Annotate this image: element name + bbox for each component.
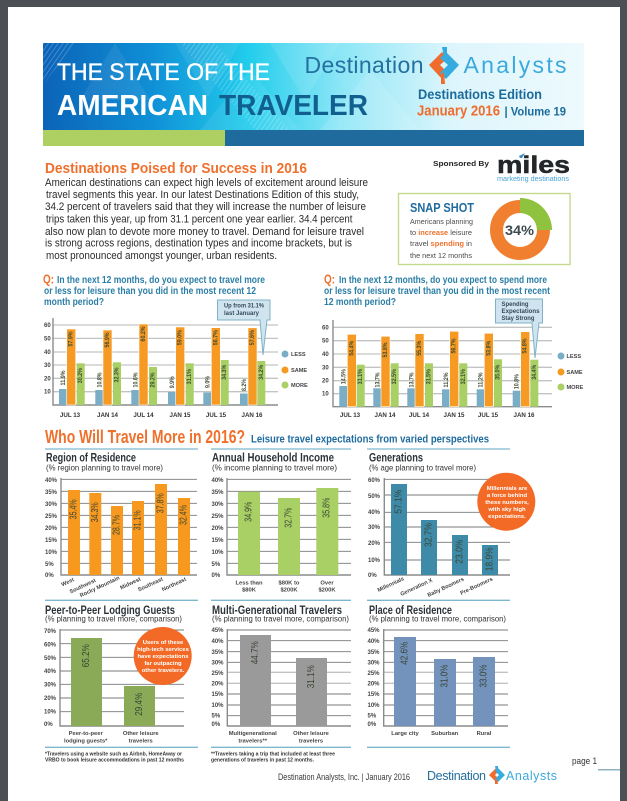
page number: page 1 bbox=[572, 756, 597, 766]
callout: high-tech users: other travelers. bbox=[142, 668, 185, 674]
bar chart: peer-to-peer: 70% bbox=[44, 629, 57, 635]
y axis labels: 50 bbox=[44, 336, 51, 342]
panel: place of residence: (% planning to travel more, comparison) bbox=[369, 614, 506, 624]
value labels: 60.2% bbox=[140, 326, 147, 342]
bar chart: peer-to-peer: 20% bbox=[44, 696, 57, 702]
value labels: 53.8% bbox=[382, 342, 389, 358]
bar chart: generations: 32.7% bbox=[424, 523, 434, 547]
panel: region of residence: (% region planning to travel more) bbox=[46, 464, 163, 472]
panel: snap shot: to increase leisure bbox=[410, 228, 472, 237]
bar chart: income: $80K to bbox=[279, 580, 300, 586]
x axis labels: JUL 14 bbox=[133, 412, 154, 419]
question: travel more or less: In the next 12 months, do you expect to travel more bbox=[57, 274, 265, 286]
bar chart: generations: 0% bbox=[368, 573, 377, 579]
bars: less bbox=[59, 389, 249, 405]
bar chart: peer-to-peer: 29.4% bbox=[134, 693, 145, 716]
panel: place of residence: Place of Residence bbox=[369, 605, 452, 617]
bar chart: peer-to-peer: lodging guests* bbox=[64, 738, 108, 744]
question: travel more or less: or less for leisure than you did in the most recent 12 bbox=[44, 285, 256, 297]
bar chart: multi-generational: 40% bbox=[212, 639, 224, 645]
legend: LESS bbox=[291, 352, 306, 358]
section heading: Who Will Travel More in 2016? bbox=[45, 427, 245, 447]
title: AMERICAN bbox=[57, 90, 208, 122]
title bbox=[57, 59, 368, 122]
question: travel more or less: month period? bbox=[44, 296, 104, 308]
intro paragraph: also now plan to devote more money to travel. Demand for leisure travel bbox=[45, 226, 364, 238]
x axis labels: JAN 15 bbox=[444, 412, 465, 419]
value labels: 9.0% bbox=[204, 376, 211, 388]
y axis labels: 50 bbox=[322, 339, 329, 345]
bar chart: generations: 40% bbox=[368, 510, 381, 516]
callout: up from 31.1%: last January bbox=[224, 310, 259, 317]
bar chart: region: 34.3% bbox=[90, 502, 101, 522]
bar chart: income: Over bbox=[320, 580, 334, 586]
value labels: 31.5% bbox=[426, 369, 432, 384]
value labels: 59.0% bbox=[177, 330, 184, 345]
bar chart: generations: 10% bbox=[368, 558, 381, 564]
bar chart: place of residence: 10% bbox=[368, 703, 380, 709]
bar chart: region: 10% bbox=[45, 550, 58, 556]
bars: same bbox=[67, 324, 257, 405]
bar chart: multi-generational: 20% bbox=[212, 682, 224, 688]
bar chart: place of residence: 30% bbox=[368, 660, 380, 666]
value labels bbox=[340, 338, 538, 389]
bar chart: region: 40% bbox=[45, 478, 58, 484]
footnote: peer-to-peer: VRBO to book leisure accommodations in past 12 months bbox=[45, 758, 184, 764]
y axis labels: 60 bbox=[322, 326, 329, 332]
legend: MORE bbox=[566, 385, 584, 391]
legend bbox=[558, 352, 584, 391]
donut chart: 34%: 34% bbox=[505, 222, 535, 238]
value labels: 31.1% bbox=[186, 369, 193, 384]
value labels: 56.7% bbox=[212, 330, 219, 345]
bar chart: generations: 23.0% bbox=[454, 540, 466, 564]
bar chart: region: 25% bbox=[45, 514, 58, 520]
x axis labels: JAN 16 bbox=[242, 412, 263, 419]
bar chart: income: $200K bbox=[318, 588, 336, 594]
legend: SAME bbox=[566, 370, 583, 376]
sponsor: miles marketing destinations: marketing destinations bbox=[497, 176, 570, 183]
edition text: Destinations Edition bbox=[418, 87, 542, 102]
bar chart: multi-generational: travelers** bbox=[238, 738, 268, 744]
bar chart: peer-to-peer: 40% bbox=[44, 669, 57, 675]
bar chart: place of residence: 25% bbox=[368, 671, 380, 677]
panel: generations bbox=[367, 449, 535, 599]
value labels: 34.3% bbox=[221, 365, 228, 380]
callout: high-tech users: high-tech services bbox=[137, 647, 190, 653]
panel: annual household income: (% income planning to travel more) bbox=[212, 464, 337, 472]
panel: multi-generational travelers: (% planning to travel more, comparison) bbox=[212, 614, 349, 624]
bar chart: income: 40% bbox=[212, 478, 224, 484]
value labels: 10.8% bbox=[514, 374, 521, 389]
edition text bbox=[417, 87, 566, 120]
edition text: January 2016 bbox=[417, 104, 500, 120]
bar chart: place of residence: 15% bbox=[368, 692, 380, 698]
panel: snap shot: Americans planning bbox=[410, 217, 473, 226]
callout: spending expectations: Stay Strong bbox=[502, 315, 535, 322]
intro paragraph: most pronounced amongst younger, urban residents. bbox=[46, 250, 277, 262]
panel: peer-to-peer lodging guests bbox=[44, 600, 198, 764]
bar chart: place of residence: 20% bbox=[368, 682, 380, 688]
bar chart: region: 30% bbox=[45, 502, 58, 508]
panel: generations: (% age planning to travel more) bbox=[369, 464, 476, 472]
bars: less bbox=[339, 386, 522, 407]
value labels: 34.2% bbox=[258, 365, 265, 380]
bar chart: region bbox=[45, 478, 197, 599]
question: travel more or less bbox=[43, 272, 265, 308]
y axis labels: 10 bbox=[322, 392, 329, 398]
value labels: 11.2% bbox=[478, 372, 485, 388]
bar chart: multi-generational bbox=[212, 628, 351, 744]
callout: high-tech users: have expectations bbox=[137, 654, 189, 660]
bar chart: place of residence: 0% bbox=[368, 722, 377, 728]
bar chart: peer-to-peer: 65.2% bbox=[81, 644, 92, 667]
title: THE STATE OF THE bbox=[57, 59, 270, 86]
x axis labels bbox=[340, 412, 535, 419]
logo: Destination Analysts: Analysts bbox=[464, 52, 566, 78]
bar chart: region: 28.7% bbox=[112, 515, 122, 535]
callout: high-tech users: Users of these bbox=[143, 640, 184, 646]
bars: more bbox=[77, 360, 265, 405]
bar chart: region: Southwest bbox=[69, 578, 97, 595]
y axis labels: 20 bbox=[44, 376, 51, 382]
bar chart: region: 35% bbox=[45, 490, 58, 496]
value labels: 14.5% bbox=[340, 369, 347, 384]
intro paragraph: American destinations can expect high levels of excitement around leisure bbox=[45, 177, 368, 189]
bar chart: peer-to-peer: Other leisure bbox=[123, 731, 159, 737]
question: spend more or less bbox=[324, 272, 550, 308]
intro paragraph bbox=[45, 177, 368, 262]
question: spend more or less: In the next 12 months, do you expect to spend more bbox=[339, 274, 547, 286]
callout: up from 31.1%: Up from 31.1% bbox=[224, 302, 264, 310]
value labels: 10.8% bbox=[96, 372, 103, 388]
x axis labels: JAN 14 bbox=[375, 412, 396, 419]
callout: millennials: these numbers, bbox=[485, 500, 529, 506]
bar chart: region: Southeast bbox=[137, 577, 164, 593]
bar chart: region: 31.1% bbox=[132, 510, 144, 530]
y axis labels bbox=[322, 326, 329, 398]
y axis labels: 20 bbox=[322, 379, 329, 385]
panel: snap shot: travel spending in bbox=[410, 239, 472, 248]
value labels: 32.1% bbox=[460, 369, 467, 384]
panel: multi-generational travelers bbox=[211, 600, 351, 764]
header banner bbox=[43, 43, 584, 146]
title: TRAVELER bbox=[219, 90, 368, 122]
sponsor: miles marketing destinations: miles bbox=[497, 152, 570, 179]
x axis labels: JAN 14 bbox=[97, 412, 119, 419]
bar chart: multi-generational: Multigenerational bbox=[229, 731, 277, 737]
footer logo bbox=[427, 766, 557, 784]
panel: region of residence bbox=[45, 449, 198, 599]
bar chart: generations bbox=[368, 478, 510, 599]
bar chart: multi-generational: 15% bbox=[212, 692, 224, 698]
bar chart: generations: 60% bbox=[368, 478, 381, 484]
bar chart: income: 10% bbox=[212, 550, 224, 556]
panel: annual household income bbox=[211, 449, 351, 594]
sponsor: miles marketing destinations: Sponsored By bbox=[433, 159, 490, 168]
bar chart: region: 5% bbox=[45, 562, 54, 568]
value labels: 57.6% bbox=[249, 330, 256, 345]
bar chart: region: Northeast bbox=[161, 577, 188, 593]
bar chart: income: Less than bbox=[235, 580, 263, 586]
value labels: 31.1% bbox=[357, 369, 364, 384]
y axis labels: 40 bbox=[322, 352, 329, 358]
section heading: Leisure travel expectations from varied perspectives bbox=[251, 434, 489, 446]
value labels: 11.2% bbox=[443, 372, 450, 388]
bar chart: region: 0% bbox=[45, 573, 54, 579]
bar chart: place of residence: 45% bbox=[368, 628, 380, 634]
bar chart: region: Midwest bbox=[119, 577, 142, 591]
value labels: 56.9% bbox=[104, 332, 111, 348]
bar chart: peer-to-peer: travelers bbox=[129, 738, 153, 744]
value labels: 30.2% bbox=[77, 368, 84, 383]
bar chart: generations: 30% bbox=[368, 525, 381, 531]
legend: MORE bbox=[291, 383, 308, 389]
panel: multi-generational travelers: Multi-Generational Travelers bbox=[212, 605, 342, 617]
value labels: 13.7% bbox=[408, 372, 415, 388]
bar chart: region: 32.4% bbox=[178, 505, 190, 525]
bar chart: multi-generational: 5% bbox=[212, 714, 221, 720]
callout: millennials: with sky high bbox=[487, 507, 526, 513]
y axis labels: 60 bbox=[44, 323, 51, 329]
bar chart: region: Rocky Mountain bbox=[79, 575, 121, 599]
chart: spend more or less bbox=[322, 299, 584, 419]
bar chart: peer-to-peer bbox=[44, 629, 184, 744]
bar chart: income: 20% bbox=[212, 526, 224, 532]
footnote: multi-generational bbox=[211, 752, 335, 764]
bar chart: income: 5% bbox=[212, 562, 221, 568]
bar chart: place of residence: Suburban bbox=[431, 731, 459, 737]
y axis labels: 30 bbox=[44, 363, 51, 369]
x axis labels: JUL 13 bbox=[340, 412, 361, 419]
value labels: 32.5% bbox=[391, 369, 398, 384]
bar chart: multi-generational: 35% bbox=[212, 650, 224, 656]
panel: annual household income: Annual Household Income bbox=[212, 452, 334, 464]
bar chart: multi-generational: 30% bbox=[212, 660, 224, 666]
panel: snap shot: the next 12 months bbox=[410, 251, 472, 260]
bar chart: generations: 18.9% bbox=[484, 547, 496, 571]
callout: spending expectations: Spending bbox=[502, 301, 529, 308]
value labels: 13.7% bbox=[374, 372, 381, 388]
panel: generations: Generations bbox=[369, 452, 423, 464]
value labels bbox=[60, 326, 265, 391]
x axis labels: JUL 13 bbox=[60, 412, 81, 419]
question: travel more or less: Q: bbox=[43, 272, 54, 286]
bar chart: multi-generational: Other leisure bbox=[293, 731, 330, 737]
bar chart: place of residence: 5% bbox=[368, 714, 377, 720]
bar chart: generations: 57.1% bbox=[394, 490, 404, 514]
bar chart: place of residence: 42.6% bbox=[400, 642, 410, 665]
value labels: 8.2% bbox=[241, 379, 248, 391]
callout: millennials bbox=[477, 473, 535, 531]
page number bbox=[572, 756, 620, 770]
legend: LESS bbox=[566, 354, 581, 360]
legend bbox=[282, 350, 308, 389]
callout: millennials: a force behind bbox=[487, 493, 528, 499]
value labels: 11.9% bbox=[60, 370, 67, 386]
bar chart: peer-to-peer: 0% bbox=[44, 722, 53, 728]
footer logo: Analysts bbox=[506, 769, 557, 783]
callout: up from 31.1% bbox=[218, 300, 270, 355]
bar chart: place of residence: Rural bbox=[477, 731, 492, 737]
value labels: 54.4% bbox=[348, 341, 355, 356]
y axis labels: 10 bbox=[44, 390, 51, 396]
bar chart: income: $200K bbox=[280, 588, 298, 594]
value labels: 35.0% bbox=[494, 365, 502, 380]
donut chart: 34% bbox=[496, 198, 552, 254]
intro heading: Destinations Poised for Success in 2016 bbox=[45, 160, 307, 177]
panel: peer-to-peer lodging guests: Peer-to-Peer Lodging Guests bbox=[45, 605, 175, 617]
footer logo: Destination bbox=[427, 769, 486, 783]
x axis labels: JUL 15 bbox=[478, 412, 499, 419]
panel: region of residence: Region of Residence bbox=[46, 452, 136, 464]
callout: high-tech users bbox=[134, 627, 192, 685]
bar chart: income: 15% bbox=[212, 538, 224, 544]
callout: high-tech users: far outpacing bbox=[144, 661, 182, 667]
bar chart: multi-generational: 10% bbox=[212, 703, 224, 709]
bar chart: place of residence: 33.0% bbox=[478, 664, 490, 688]
value labels: 29.2% bbox=[150, 372, 156, 388]
bar chart: region: 20% bbox=[45, 526, 58, 532]
bar chart: place of residence: 40% bbox=[368, 639, 380, 645]
x axis labels: JUL 14 bbox=[409, 412, 430, 419]
value labels: 34.4% bbox=[531, 365, 538, 380]
question: spend more or less: or less for leisure travel than you did in the most recent bbox=[324, 285, 550, 297]
chart: travel more or less bbox=[44, 300, 308, 419]
bar chart: income: 34.9% bbox=[244, 502, 254, 522]
callout: spending expectations: Expectations bbox=[502, 308, 540, 315]
value labels: 53.8% bbox=[485, 341, 492, 356]
bar chart: peer-to-peer: 50% bbox=[44, 656, 57, 662]
footnote: peer-to-peer: *Travelers using a website such as Airbnb, HomeAway or bbox=[45, 752, 182, 758]
bar chart: generations: Pre-Boomers bbox=[460, 577, 494, 597]
bar chart: income: 30% bbox=[212, 502, 224, 508]
panel: place of residence bbox=[367, 600, 510, 747]
bar chart: multi-generational: 25% bbox=[212, 671, 224, 677]
bar chart: place of residence: 31.0% bbox=[440, 664, 450, 688]
intro paragraph: is strong across regions, destination types and income brackets, but is bbox=[45, 238, 352, 250]
sponsor: miles marketing destinations bbox=[433, 152, 570, 183]
value labels: 56.7% bbox=[451, 338, 458, 354]
edition text: | Volume 19 bbox=[504, 104, 566, 118]
bar chart: region: 37.8% bbox=[156, 493, 166, 513]
bar chart: generations: Baby Boomers bbox=[427, 577, 465, 599]
y axis labels: 40 bbox=[44, 350, 51, 356]
bar chart: generations: Millennials bbox=[377, 576, 405, 594]
bar chart: region: West bbox=[61, 577, 75, 588]
x axis labels: JUL 15 bbox=[206, 412, 227, 419]
bars: same bbox=[347, 331, 530, 407]
section heading bbox=[45, 427, 489, 447]
bar chart: income: 25% bbox=[212, 514, 224, 520]
bar chart: place of residence bbox=[368, 628, 508, 737]
value labels: 9.9% bbox=[169, 376, 176, 388]
bar chart: income: 32.7% bbox=[284, 508, 294, 528]
bar chart: region: 35.4% bbox=[68, 499, 80, 519]
logo: Destination Analysts bbox=[304, 47, 566, 84]
bar chart: peer-to-peer: Peer-to-peer bbox=[69, 731, 104, 737]
intro paragraph: travel segments this year. In our latest Destinations Edition of this study, bbox=[46, 189, 359, 201]
legend: SAME bbox=[291, 368, 307, 374]
bar chart: peer-to-peer: 30% bbox=[44, 682, 57, 688]
footnote: multi-generational: **Travelers taking a trip that included at least three bbox=[211, 752, 335, 758]
logo: Destination Analysts: Destination bbox=[304, 52, 424, 78]
x axis labels bbox=[60, 412, 263, 419]
bar chart: generations: 50% bbox=[368, 494, 381, 500]
bar chart: peer-to-peer: 60% bbox=[44, 642, 57, 648]
callout: spending expectations bbox=[496, 299, 542, 358]
bar chart: generations: 20% bbox=[368, 541, 381, 547]
bar chart: place of residence: 35% bbox=[368, 650, 380, 656]
bar chart: multi-generational: 44.7% bbox=[250, 641, 261, 664]
bar chart: multi-generational: 45% bbox=[212, 628, 224, 634]
y axis labels bbox=[44, 323, 51, 396]
value labels: 10.6% bbox=[132, 372, 139, 388]
footer credit: Destination Analysts, Inc. | January 2016 bbox=[278, 772, 410, 782]
bar chart: income: 35% bbox=[212, 490, 224, 496]
bar chart: place of residence: Large city bbox=[391, 731, 419, 737]
value labels: 54.8% bbox=[522, 338, 529, 354]
bar chart: generations: Generation X bbox=[400, 578, 434, 598]
bar chart: multi-generational: travelers bbox=[299, 738, 323, 744]
value labels: 32.3% bbox=[114, 367, 120, 382]
bar chart: peer-to-peer: 10% bbox=[44, 710, 57, 716]
intro paragraph: trips taken this year, up from 31.1 percent one year earlier. 34.4 percent bbox=[46, 214, 353, 226]
callout: millennials: Millennials are bbox=[487, 486, 528, 492]
y axis labels: 30 bbox=[322, 366, 329, 372]
value labels: 55.3% bbox=[416, 341, 423, 356]
bars: more bbox=[357, 359, 538, 407]
intro paragraph: 34.2 percent of travelers said that they will increase the number of leisure bbox=[45, 201, 366, 213]
bar chart: region: 15% bbox=[45, 538, 58, 544]
footnote: peer-to-peer bbox=[45, 752, 184, 764]
x axis labels: JAN 15 bbox=[170, 412, 191, 419]
bar chart: income bbox=[212, 478, 351, 594]
footnote: multi-generational: generations of travelers in past 12 months. bbox=[211, 758, 315, 764]
value labels: 57.9% bbox=[68, 331, 75, 346]
bar chart: income: 0% bbox=[212, 573, 221, 579]
bar chart: multi-generational: 31.1% bbox=[306, 665, 317, 688]
bar chart: income: $80K bbox=[242, 588, 257, 594]
panel: snap shot: SNAP SHOT bbox=[410, 201, 474, 215]
x axis labels: JAN 16 bbox=[514, 412, 535, 419]
bar chart: multi-generational: 0% bbox=[212, 722, 221, 728]
bar chart: income: 35.8% bbox=[322, 498, 332, 518]
question: spend more or less: 12 month period? bbox=[324, 296, 396, 308]
question: spend more or less: Q: bbox=[324, 272, 335, 286]
callout: millennials: expectations. bbox=[488, 514, 526, 520]
panel: peer-to-peer lodging guests: (% planning to travel more, comparison) bbox=[45, 614, 182, 624]
panel: snap shot bbox=[398, 194, 570, 264]
